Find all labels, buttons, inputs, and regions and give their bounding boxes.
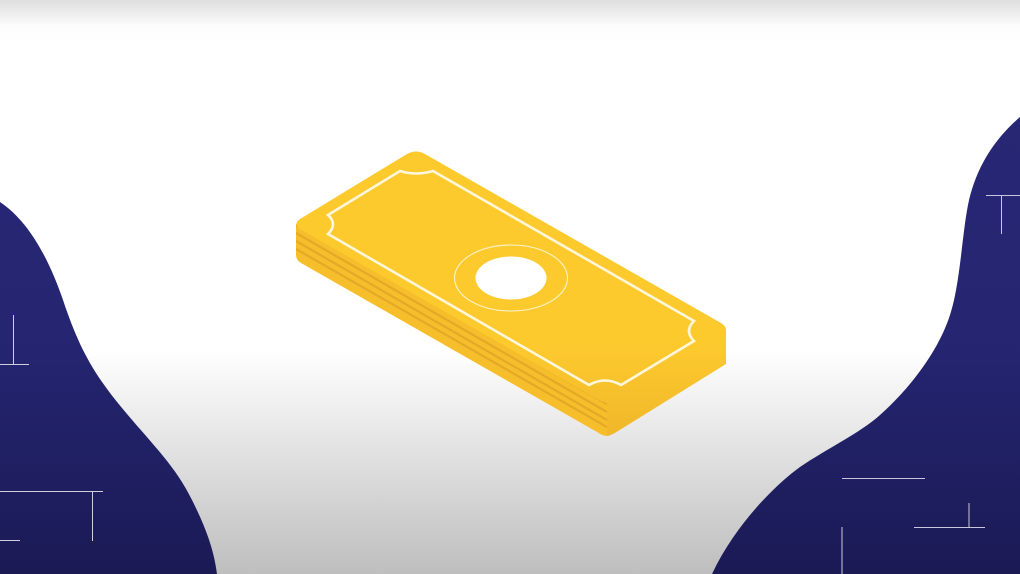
stack left side [296, 224, 607, 436]
central white seal [476, 256, 546, 300]
right navy blob [712, 117, 1020, 574]
right blob line accents [842, 195, 1020, 574]
page stripes [296, 225, 607, 427]
outer seal ring [454, 245, 568, 311]
inner note border [328, 171, 694, 385]
icon: stack of yellow banknotes [296, 152, 726, 436]
left blob line accents [0, 315, 103, 541]
left navy blob [0, 202, 217, 574]
top face and right side of note [296, 152, 726, 436]
